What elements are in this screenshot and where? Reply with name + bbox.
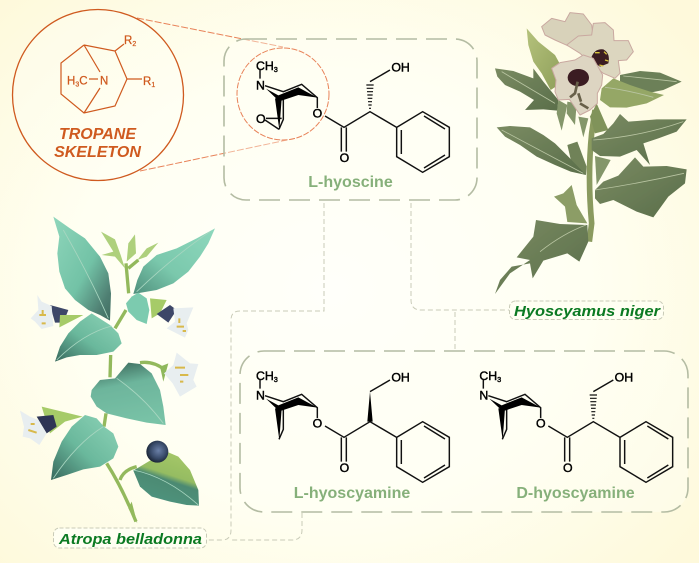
label: D-hyoscyamine: D-hyoscyamine bbox=[516, 485, 635, 502]
berry bbox=[146, 441, 168, 463]
molecule: L-hyoscine: O bbox=[340, 151, 349, 165]
flower: lower bbox=[552, 55, 603, 115]
structure labels: 3 bbox=[75, 82, 79, 88]
molecule: L-hyoscine: OH bbox=[391, 60, 410, 74]
leaf: upper right bbox=[620, 71, 682, 93]
structure labels: 1 bbox=[151, 82, 155, 89]
zoom lines bbox=[137, 18, 287, 171]
molecule: L-hyoscine: CH bbox=[256, 59, 274, 73]
plant: Atropa belladonna bbox=[20, 217, 215, 523]
molecule: D-hyoscyamine: 3 bbox=[497, 375, 501, 384]
molecule: L-hyoscine: O bbox=[256, 112, 266, 126]
flower centre: lower bbox=[568, 69, 589, 86]
tropane structure bbox=[61, 44, 142, 113]
molecule: L-hyoscyamine bbox=[256, 369, 449, 482]
label: Hyoscyamus niger: Hyoscyamus niger bbox=[514, 303, 661, 320]
leaf: small centre bbox=[126, 293, 149, 324]
structure labels: N bbox=[100, 76, 108, 88]
molecule: L-hyoscine: 3 bbox=[274, 65, 278, 74]
tropane skeleton circle bbox=[12, 10, 287, 180]
leaf veins bbox=[502, 72, 684, 252]
molecule: D-hyoscyamine bbox=[479, 369, 673, 482]
flower 3 bbox=[160, 363, 168, 382]
panel outline bbox=[240, 351, 688, 512]
label: Atropa belladonna: Atropa belladonna bbox=[58, 531, 202, 548]
structure labels bbox=[67, 35, 155, 89]
molecule: L-hyoscine: N bbox=[256, 78, 265, 92]
stems bbox=[104, 260, 165, 522]
leaf: top left bbox=[53, 217, 111, 321]
leaf: lower left bbox=[51, 415, 118, 480]
label: L-hyoscyamine: L-hyoscyamine bbox=[294, 485, 410, 502]
leaf: lower right bbox=[595, 157, 687, 217]
small leaves bbox=[557, 100, 567, 131]
flower 1 bbox=[50, 305, 68, 323]
leaf veins bbox=[53, 230, 210, 505]
molecule: D-hyoscyamine: O bbox=[563, 461, 573, 475]
leaf: top right bbox=[133, 228, 215, 294]
structure labels: C bbox=[79, 76, 88, 88]
molecule: L-hyoscyamine: OH bbox=[391, 370, 410, 384]
heading: tropane skeleton: SKELETON bbox=[54, 144, 141, 161]
molecule: D-hyoscyamine: OH bbox=[615, 370, 633, 384]
structure labels: R bbox=[143, 76, 151, 88]
stem bbox=[589, 110, 595, 242]
plant: Hyoscyamus niger bbox=[495, 13, 687, 294]
structure labels: 2 bbox=[132, 41, 136, 48]
molecule: L-hyoscine: O bbox=[313, 106, 322, 120]
leaf: left middle bbox=[55, 313, 122, 362]
structure labels: R bbox=[124, 35, 132, 47]
circle outline bbox=[12, 10, 184, 180]
molecule: D-hyoscyamine: O bbox=[536, 416, 546, 430]
flower: rear bbox=[542, 13, 593, 47]
molecule: L-hyoscyamine: O bbox=[340, 461, 349, 475]
flower 4 bbox=[42, 407, 83, 433]
molecule: L-hyoscyamine: N bbox=[256, 388, 265, 402]
molecule: L-hyoscyamine: 3 bbox=[274, 375, 278, 384]
leaf: bottom left bbox=[495, 220, 588, 294]
molecule: L-hyoscine bbox=[256, 59, 449, 172]
label: L-hyoscine: L-hyoscine bbox=[308, 174, 393, 191]
flower: upper bbox=[567, 23, 633, 78]
circle highlight bbox=[237, 48, 329, 140]
leaf: heart bbox=[91, 363, 166, 425]
leaf: left bbox=[495, 68, 558, 111]
leaf: berry bbox=[133, 452, 199, 506]
leaf: middle left bbox=[497, 126, 586, 175]
leaf: middle right bbox=[592, 114, 687, 165]
molecule: D-hyoscyamine: CH bbox=[479, 369, 497, 383]
panel: hyoscyamine bbox=[240, 351, 688, 512]
molecule: D-hyoscyamine: N bbox=[479, 388, 488, 402]
molecule: L-hyoscyamine: CH bbox=[256, 369, 274, 383]
heading: tropane skeleton bbox=[54, 126, 141, 161]
panel outline bbox=[224, 39, 477, 200]
structure labels: H bbox=[67, 76, 75, 88]
flower centre: upper bbox=[592, 49, 609, 67]
bud bbox=[554, 185, 587, 223]
leaf: upper left pale bbox=[527, 28, 565, 90]
flower 2 bbox=[150, 298, 167, 318]
connector lines bbox=[207, 203, 509, 540]
top buds bbox=[101, 232, 125, 268]
molecule: L-hyoscyamine: O bbox=[313, 416, 322, 430]
heading: tropane skeleton: TROPANE bbox=[59, 126, 137, 143]
panel: L-hyoscine bbox=[224, 39, 477, 200]
